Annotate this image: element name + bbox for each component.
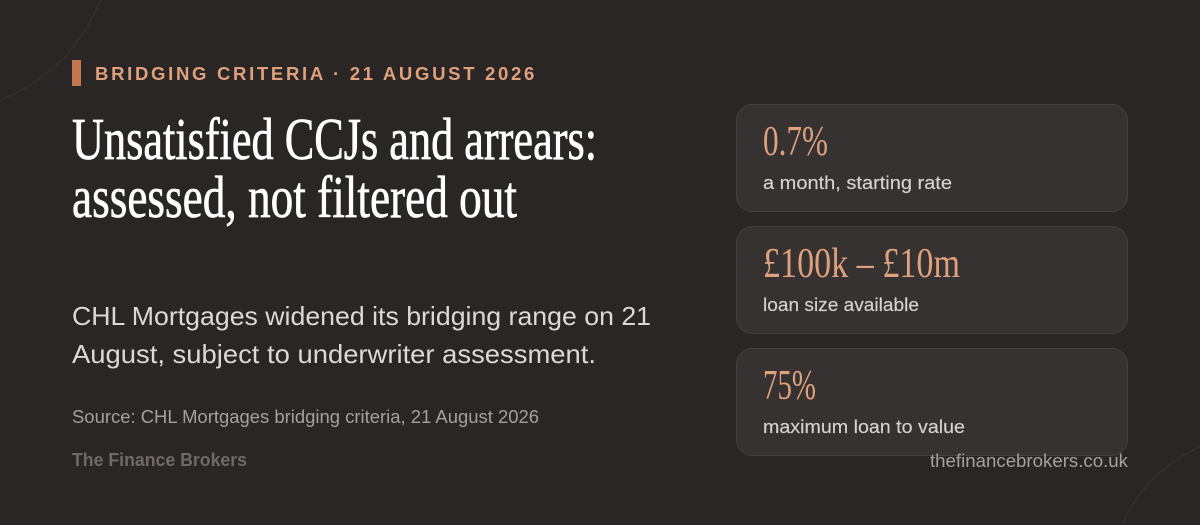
eyebrow: bridging criteria and date — [72, 60, 537, 86]
eyebrow text: BRIDGING CRITERIA · 21 AUGUST 2026 — [95, 64, 537, 84]
label: a month, starting rate: a month, starting rate — [763, 173, 952, 193]
accent bar — [72, 60, 81, 86]
summary text: CHL Mortgages widened its bridging range on 21 — [72, 301, 651, 331]
brand name: The Finance Brokers — [72, 450, 247, 470]
website url: thefinancebrokers.co.uk — [930, 451, 1129, 471]
summary text: August, subject to underwriter assessment. — [72, 339, 596, 369]
panel: starting rate — [736, 104, 1128, 212]
value: 75%: 75% — [763, 363, 816, 409]
title: assessed, not filtered out — [72, 164, 517, 230]
summary text — [72, 301, 651, 369]
panel: loan size — [736, 226, 1128, 334]
panel: loan to value — [736, 348, 1128, 456]
label: maximum loan to value: maximum loan to value — [763, 417, 965, 437]
title: Unsatisfied CCJs and arrears: — [72, 106, 597, 172]
value: £100k – £10m: £100k – £10m — [763, 241, 960, 287]
value: 0.7%: 0.7% — [763, 119, 828, 165]
source line: Source: CHL Mortgages bridging criteria, 21 August 2026 — [72, 407, 539, 427]
title — [72, 106, 597, 230]
label: loan size available: loan size available — [763, 295, 919, 315]
